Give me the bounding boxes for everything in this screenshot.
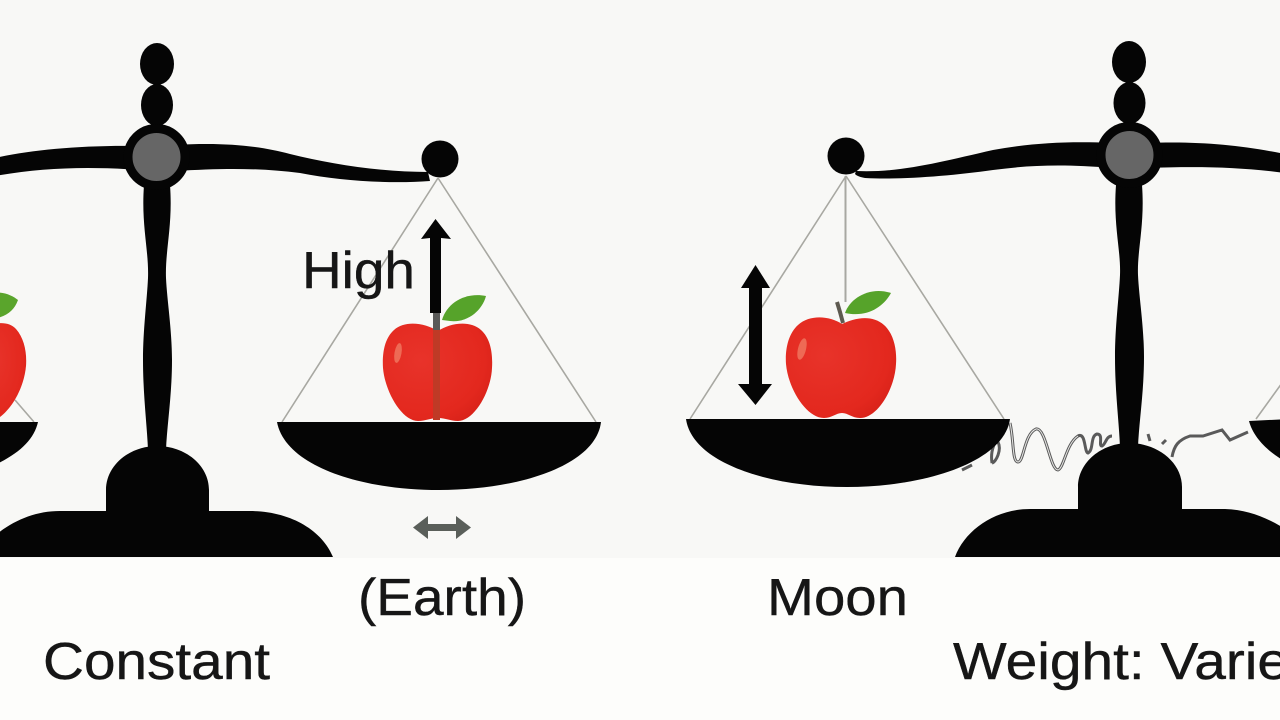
weight label: Weight: Varie xyxy=(953,633,1280,691)
finial xyxy=(1112,41,1146,124)
earth apple xyxy=(383,295,492,421)
moon label: Moon xyxy=(767,569,908,627)
centre string xyxy=(844,176,846,302)
moon apple xyxy=(786,291,896,418)
left pan fragment xyxy=(0,422,38,467)
left balance scale xyxy=(0,43,601,557)
finial xyxy=(140,43,174,126)
high label: High xyxy=(302,242,415,300)
pan strings xyxy=(282,178,596,422)
stand base xyxy=(0,446,333,557)
right pan fragment xyxy=(1249,419,1280,464)
beam xyxy=(855,142,1280,179)
column xyxy=(143,185,172,450)
apple fragment xyxy=(0,292,26,420)
squiggle wire xyxy=(962,423,1248,470)
right pan xyxy=(277,422,601,490)
right pan string fragment xyxy=(1256,383,1280,419)
stand base xyxy=(955,443,1280,557)
left pan xyxy=(686,419,1010,487)
beam end knob xyxy=(422,140,458,178)
beam end knob xyxy=(828,138,864,174)
pivot xyxy=(128,128,185,186)
column xyxy=(1115,185,1144,447)
constant label: Constant xyxy=(43,633,271,691)
pan strings xyxy=(690,176,1004,419)
high arrow xyxy=(421,219,451,313)
moon double arrow xyxy=(738,265,772,405)
beam xyxy=(0,144,430,182)
right balance scale xyxy=(686,41,1280,557)
earth label: (Earth) xyxy=(358,569,526,627)
left pan string fragment xyxy=(15,400,34,422)
pivot xyxy=(1101,126,1158,184)
small double arrow xyxy=(413,516,471,539)
